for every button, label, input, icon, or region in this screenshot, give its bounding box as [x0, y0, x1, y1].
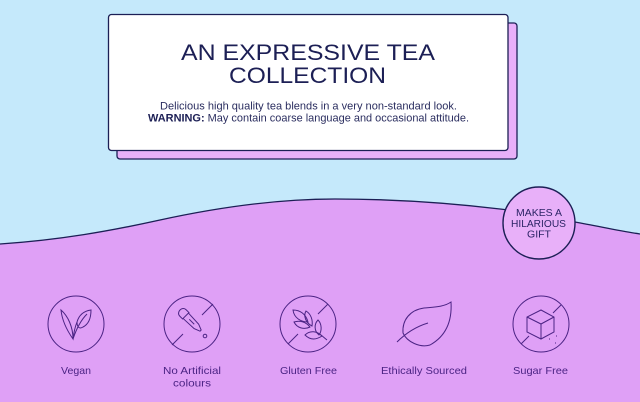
card shadow	[117, 23, 517, 159]
badge: makes a hilarious gift	[503, 187, 575, 259]
labels: Vegan	[61, 365, 91, 377]
labels: Gluten Free	[280, 365, 337, 377]
icon: vegan	[48, 296, 104, 352]
badge: makes a hilarious gift: HILARIOUS	[511, 218, 566, 230]
labels: colours	[173, 378, 211, 390]
description: WARNING: May contain coarse language and occasional attitude.	[148, 112, 469, 124]
hill outline	[0, 199, 640, 244]
badge: makes a hilarious gift: MAKES A	[516, 207, 562, 219]
icon: sugar free	[513, 296, 569, 352]
labels: Sugar Free	[513, 365, 568, 377]
description	[148, 100, 469, 124]
labels: No Artificial	[163, 365, 221, 377]
title: AN EXPRESSIVE TEA	[181, 40, 435, 65]
badge: makes a hilarious gift: GIFT	[527, 228, 552, 240]
purple hill background	[0, 199, 640, 402]
title: COLLECTION	[229, 63, 386, 88]
description: Delicious high quality tea blends in a very non-standard look.	[160, 100, 457, 112]
icon: no artificial colours	[164, 296, 220, 352]
labels: Ethically Sourced	[381, 365, 467, 377]
icon: ethically sourced leaf	[397, 302, 451, 346]
card	[108, 14, 508, 150]
icon: gluten free	[280, 296, 336, 352]
labels	[61, 365, 568, 390]
title	[181, 40, 435, 88]
